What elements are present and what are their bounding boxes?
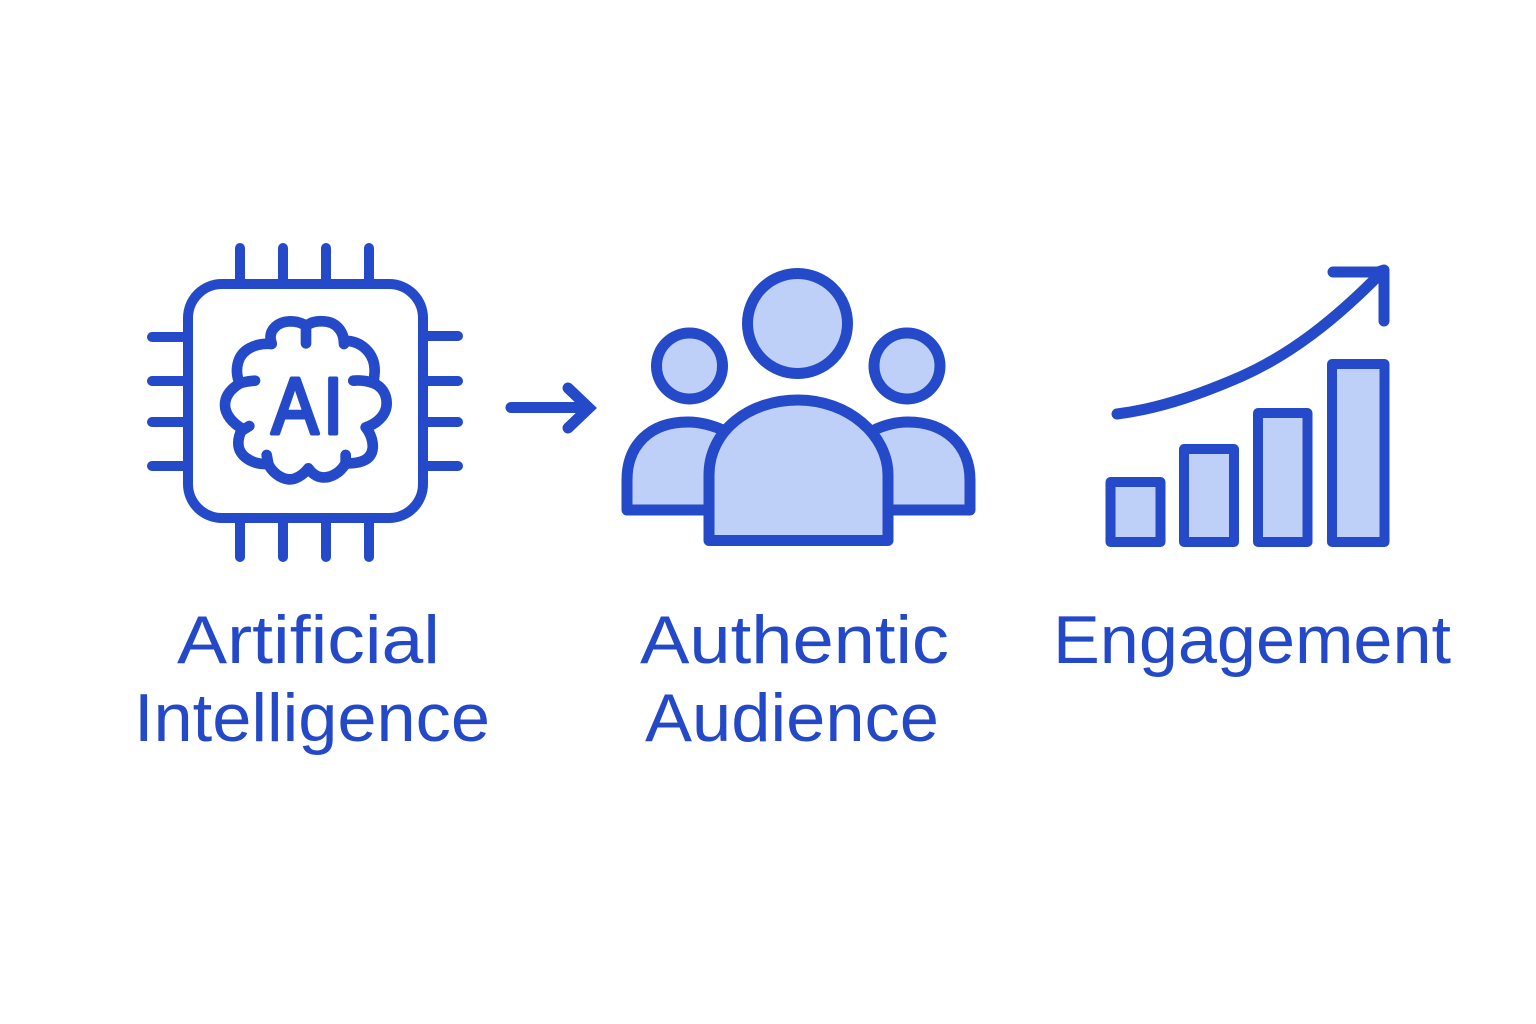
label: Engagement: Engagement	[1053, 602, 1451, 678]
bar 3	[1258, 413, 1308, 542]
text: AI label: I	[323, 361, 343, 450]
person: left	[627, 333, 725, 510]
icon: growth chart	[1110, 270, 1384, 542]
person: center	[709, 274, 888, 540]
icon: brain outline	[225, 321, 387, 479]
text: AI label: A	[272, 361, 319, 450]
bar 4	[1332, 364, 1384, 542]
icon: AI chip	[152, 248, 458, 557]
trend arrow	[1117, 270, 1384, 414]
person: right	[872, 333, 970, 510]
arrow: AI to audience	[511, 388, 589, 428]
label: Artificial Intelligence: Intelligence	[134, 680, 490, 756]
bar 1	[1110, 482, 1160, 542]
label: Artificial Intelligence: Artificial	[177, 602, 440, 678]
chip pins	[152, 248, 458, 557]
label: Authentic Audience: Authentic	[640, 602, 949, 678]
label: Authentic Audience	[640, 602, 949, 756]
bar 2	[1184, 449, 1234, 542]
icon: audience group	[627, 274, 970, 540]
label: Authentic Audience: Audience	[645, 680, 939, 756]
label: Artificial Intelligence	[134, 602, 490, 756]
chip body	[188, 284, 423, 518]
